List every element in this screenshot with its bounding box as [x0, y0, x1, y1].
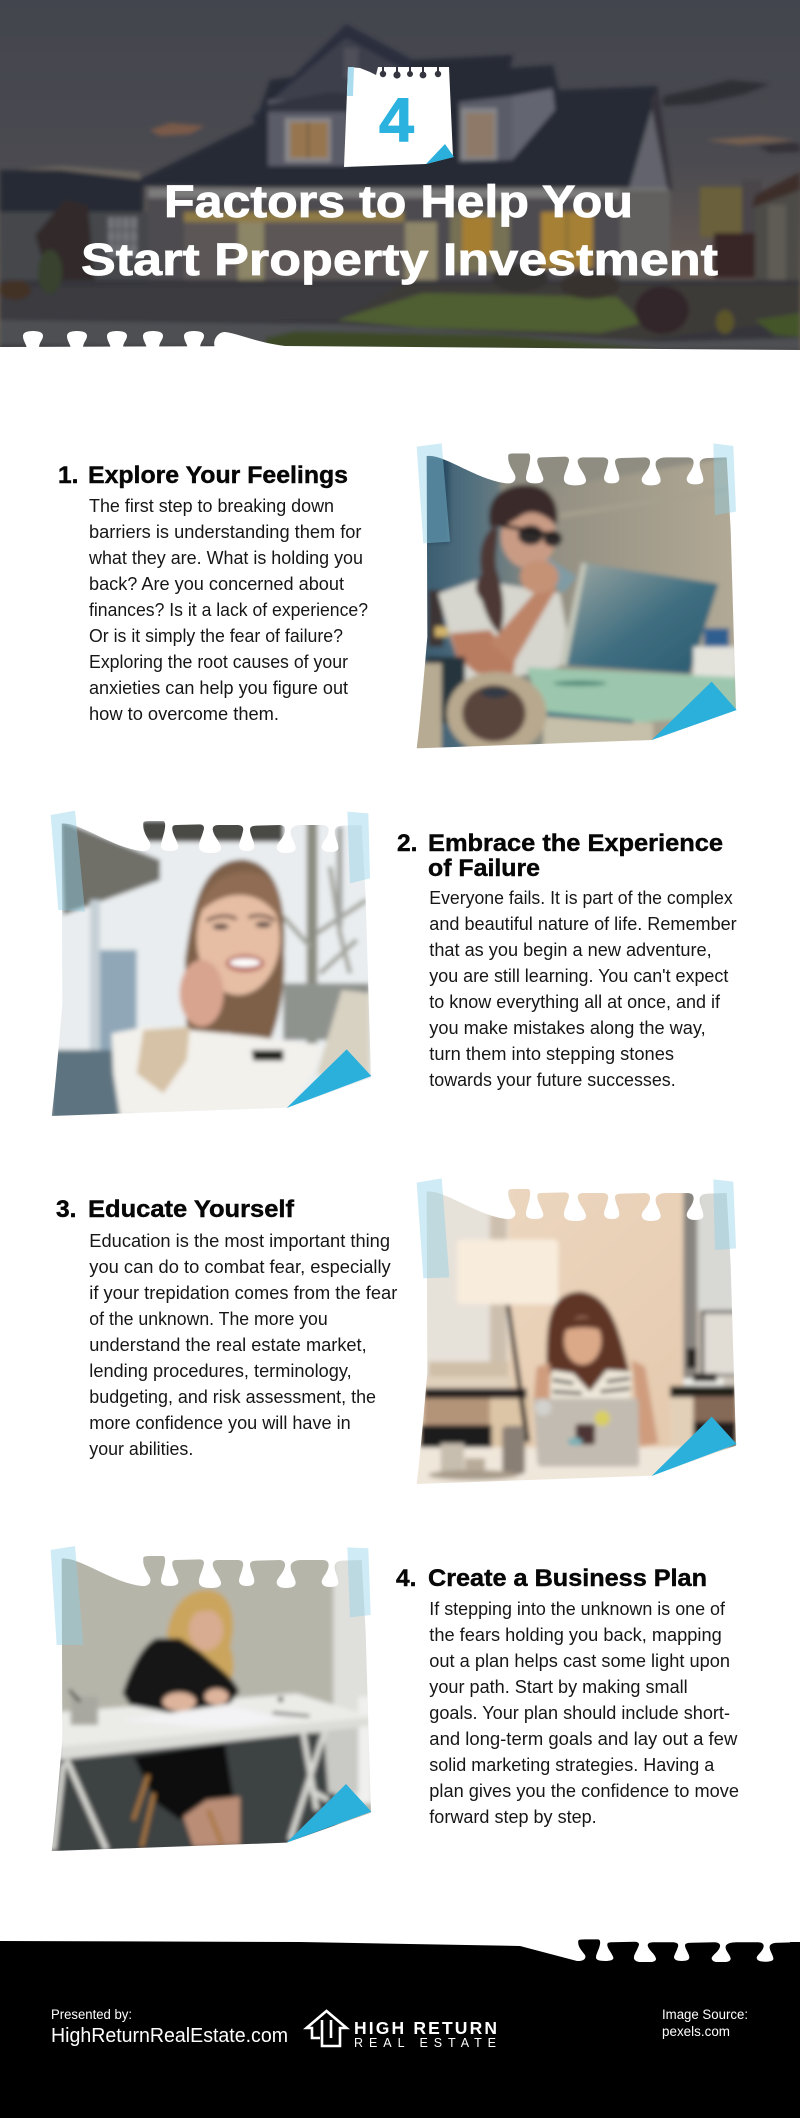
- panel: black footer with torn top edge: [0, 1939, 800, 2118]
- blue corner: [287, 1784, 371, 1843]
- section 2: embrace the experience of failure text: you are still learning. You can't expect: [429, 966, 728, 986]
- section 3: educate yourself text: lending procedures, terminology,: [89, 1361, 352, 1381]
- blue corner: [287, 1049, 371, 1108]
- logo: high return real estate: HIGH RETURN: [354, 2018, 497, 2038]
- section 4: create a business plan text: solid marketing strategies. Having a: [429, 1755, 715, 1775]
- tape strips: [51, 811, 370, 912]
- section 3: educate yourself text: more confidence you will have in: [89, 1413, 351, 1433]
- section 2: embrace the experience of failure text: towards your future successes.: [429, 1070, 676, 1090]
- section 1: explore your feelings text: back? Are you concerned about: [89, 574, 344, 594]
- section 3: educate yourself text: 3.: [56, 1196, 76, 1223]
- section 1: explore your feelings text: Exploring the root causes of your: [89, 652, 348, 672]
- section 3: educate yourself text: [56, 1196, 397, 1459]
- presented by text: HighReturnRealEstate.com: [51, 2025, 288, 2047]
- section 3: educate yourself text: you can do to combat fear, especially: [89, 1257, 391, 1277]
- section 1: explore your feelings text: how to overcome them.: [89, 704, 279, 724]
- section 4: create a business plan text: If stepping into the unknown is one of: [429, 1599, 726, 1619]
- section 2: embrace the experience of failure text: that as you begin a new adventure,: [429, 940, 712, 960]
- image source text: [662, 2007, 748, 2039]
- section 3: educate yourself text: understand the real estate market,: [89, 1335, 367, 1355]
- section 1: explore your feelings text: anxieties can help you figure out: [89, 678, 348, 698]
- section 4: create a business plan text: plan gives you the confidence to move: [429, 1781, 739, 1801]
- section 3: educate yourself text: of the unknown. The more you: [89, 1309, 328, 1329]
- section 3: educate yourself text: Education is the most important thing: [89, 1231, 390, 1251]
- presented by text: Presented by:: [51, 2007, 132, 2022]
- photo 1: woman frowning at laptop: [416, 444, 737, 748]
- blue corner: [652, 1417, 737, 1476]
- section 1: explore your feelings text: what they are. What is holding you: [88, 548, 363, 568]
- image source text: Image Source:: [662, 2007, 748, 2022]
- section 4: create a business plan text: the fears holding you back, mapping: [429, 1625, 722, 1645]
- logo: high return real estate: [306, 2011, 497, 2050]
- section 2: embrace the experience of failure text: to know everything all at once, and if: [429, 992, 721, 1012]
- section 4: create a business plan text: forward step by step.: [429, 1807, 597, 1827]
- title: Start Property Investment: [81, 234, 718, 285]
- section 3: educate yourself text: if your trepidation comes from the fear: [89, 1283, 397, 1303]
- section 1: explore your feelings text: barriers is understanding them for: [89, 522, 362, 542]
- section 2: embrace the experience of failure text: [397, 830, 737, 1090]
- section 2: embrace the experience of failure text: turn them into stepping stones: [429, 1044, 674, 1064]
- blue corner: [652, 682, 737, 740]
- photo 2: smiling woman with tablet: [50, 810, 372, 1116]
- section 2: embrace the experience of failure text: and beautiful nature of life. Remember: [429, 914, 737, 934]
- section 2: embrace the experience of failure text: you make mistakes along the way,: [429, 1018, 706, 1038]
- note card with number 4: 4: [379, 86, 415, 155]
- title: Factors to Help You: [164, 176, 633, 227]
- panel: header photo of house at dusk: [0, 0, 800, 352]
- photo 3: woman working on laptop beside a lamp: [416, 1178, 737, 1484]
- presented by text: [51, 2007, 288, 2047]
- section 4: create a business plan text: [396, 1565, 739, 1827]
- tape strips: [417, 1178, 736, 1278]
- image source text: pexels.com: [662, 2024, 730, 2039]
- section 3: educate yourself text: Educate Yourself: [88, 1196, 295, 1223]
- tape strips: [51, 1546, 371, 1645]
- section 4: create a business plan text: goals. Your plan should include short-: [429, 1703, 730, 1723]
- section 1: explore your feelings text: Or is it simply the fear of failure?: [89, 626, 343, 646]
- section 2: embrace the experience of failure text: Embrace the Experience: [428, 830, 723, 857]
- section 3: educate yourself text: budgeting, and risk assessment, the: [89, 1387, 376, 1407]
- section 1: explore your feelings text: finances? Is it a lack of experience?: [89, 600, 368, 620]
- section 2: embrace the experience of failure text: 2.: [397, 830, 417, 857]
- section 1: explore your feelings text: 1.: [58, 462, 78, 489]
- photo 4: woman writing at a white desk: [50, 1546, 372, 1851]
- section 3: educate yourself text: your abilities.: [89, 1439, 193, 1459]
- section 1: explore your feelings text: Explore Your Feelings: [88, 462, 348, 489]
- section 2: embrace the experience of failure text: Everyone fails. It is part of the complex: [429, 888, 733, 908]
- tape strips: [417, 443, 736, 543]
- section 4: create a business plan text: your path. Start by making small: [429, 1677, 688, 1697]
- section 4: create a business plan text: out a plan helps cast some light upon: [429, 1651, 730, 1671]
- section 4: create a business plan text: Create a Business Plan: [428, 1565, 707, 1592]
- logo: high return real estate: REAL ESTATE: [354, 2036, 496, 2050]
- section 2: embrace the experience of failure text: of Failure: [428, 855, 540, 882]
- section 1: explore your feelings text: The first step to breaking down: [89, 496, 334, 516]
- section 1: explore your feelings text: [58, 462, 368, 724]
- note card with number 4: [344, 67, 454, 167]
- section 4: create a business plan text: and long-term goals and lay out a few: [429, 1729, 738, 1749]
- section 4: create a business plan text: 4.: [396, 1565, 416, 1592]
- header torn bottom edge: [0, 331, 800, 352]
- title: [81, 176, 718, 285]
